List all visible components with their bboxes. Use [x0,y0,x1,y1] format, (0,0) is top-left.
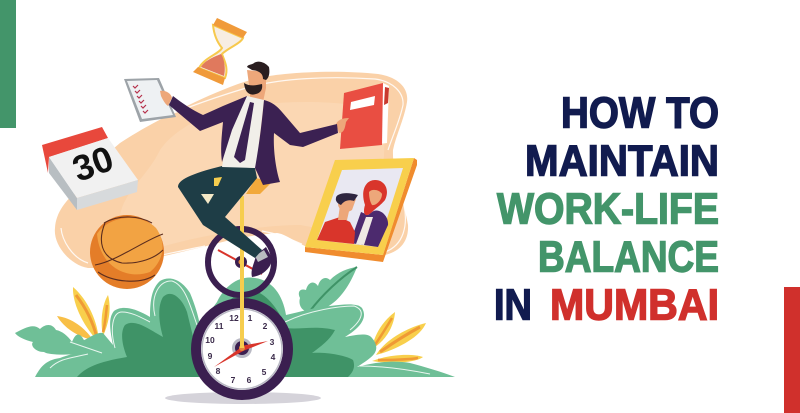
line: mumbai: MUMBAI [550,282,719,330]
clock numbers: 7 [231,375,236,385]
hourglass [193,18,247,85]
hair [247,62,269,80]
clock numbers: 9 [208,351,213,361]
clipboard with checklist [124,78,176,122]
dark green bush [77,291,354,377]
red folder [336,83,389,149]
shoe [252,247,272,277]
clock wheel [196,303,288,395]
clock numbers: 11 [214,321,224,331]
trousers [178,166,262,258]
peach background blob [55,72,408,268]
family photo frame [305,158,417,262]
tie [234,102,254,163]
clock numbers: 8 [216,366,221,376]
seat [246,178,272,194]
clock numbers: 3 [270,337,275,347]
small wheel [208,229,274,295]
yellow leaves right [372,312,426,363]
clock hands [214,341,268,367]
clock numbers: 12 [229,313,239,323]
clock numbers: 4 [271,352,276,362]
green corner bar [0,0,16,128]
calendar showing 30 [42,127,138,210]
line: work-life: WORK-LIFE [497,186,719,234]
clock numbers: 10 [205,335,215,345]
line: maintain: MAINTAIN [525,138,719,186]
wheel shadow [165,392,321,404]
clock numbers: 2 [263,321,268,331]
leaf left [15,325,85,355]
beard [244,83,262,95]
shirt [222,96,264,168]
headline [494,90,719,330]
businessman [160,62,338,277]
calendar date: 30 [67,137,119,190]
line: balance: BALANCE [538,234,719,282]
neck and face [247,70,266,102]
yellow leaves left [57,287,110,342]
clock numbers: 5 [262,367,267,377]
unicycle pole [240,196,244,348]
jacket and arms [169,96,338,185]
hand holding folder [336,118,349,133]
woman in photo [350,210,388,247]
basketball [90,215,164,289]
clock numbers: 6 [247,375,252,385]
light green bush [35,277,455,377]
red corner bar [784,287,800,413]
bushes [15,267,455,377]
man in photo [317,217,355,244]
clock numbers: 1 [248,313,253,323]
left hand [160,91,172,106]
clock numbers [205,313,276,385]
leaf right [299,267,357,312]
line: how to: HOW TO [561,90,719,138]
line: in: IN [494,282,532,330]
